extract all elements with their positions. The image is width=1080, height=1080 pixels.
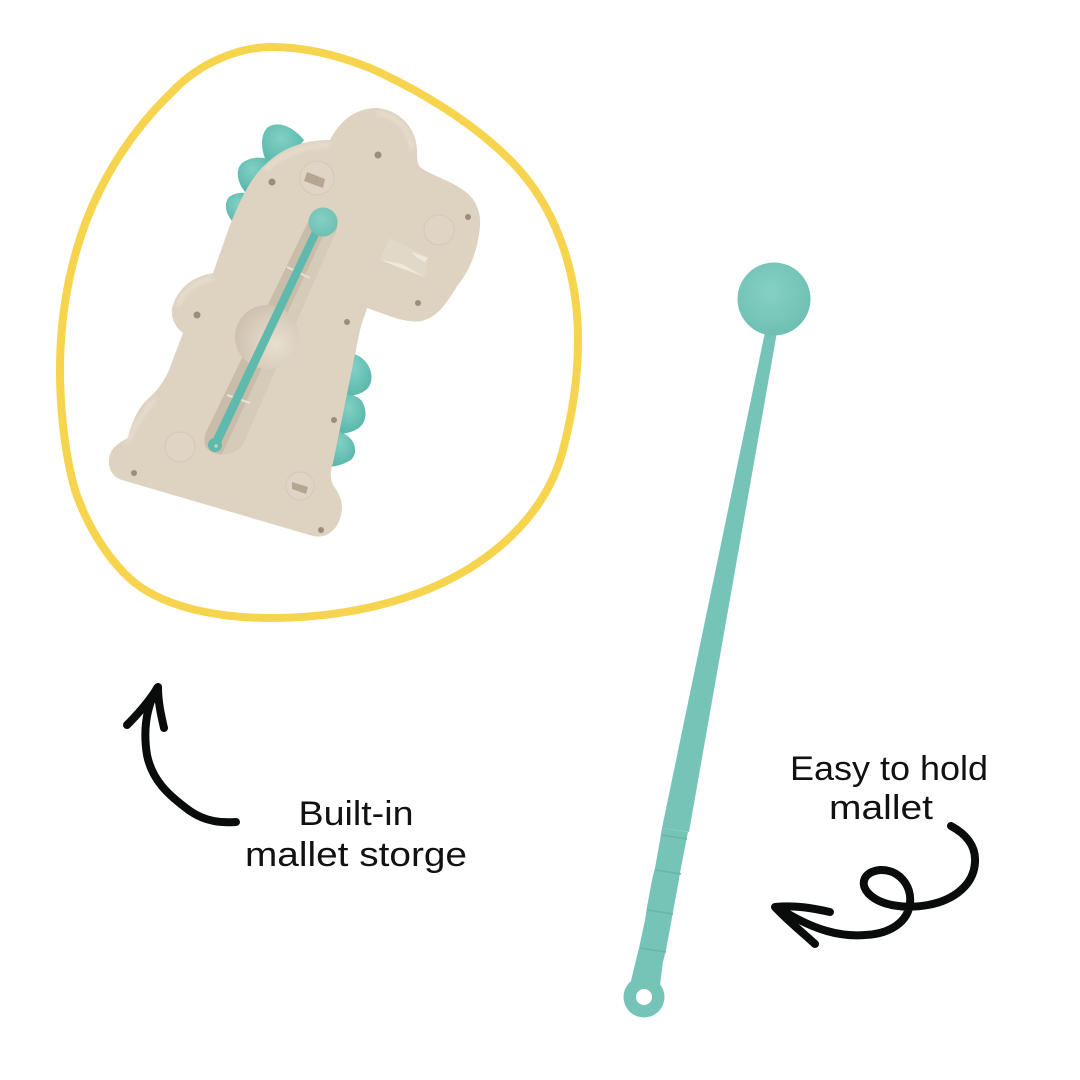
- centre recess: [235, 305, 299, 369]
- mallet in slot: [208, 208, 338, 452]
- lower spikes: [328, 352, 371, 467]
- sticker glints: [381, 252, 428, 276]
- mallet slot: [204, 208, 338, 454]
- screws: [131, 152, 471, 533]
- rectangular clip holes: [292, 172, 325, 494]
- caption: easy to hold mallet: mallet: [829, 789, 934, 827]
- upper spikes: [226, 124, 304, 224]
- body edge highlight: [128, 113, 412, 442]
- caption: built-in mallet storage: mallet storge: [245, 836, 467, 874]
- arrow: to mallet storage: [127, 687, 236, 822]
- caption: built-in mallet storage: [245, 795, 467, 874]
- mallet head: [738, 262, 810, 336]
- caption: built-in mallet storage: Built-in: [298, 795, 414, 833]
- caption: easy to hold mallet: [790, 750, 988, 827]
- mallet grip: [630, 828, 688, 985]
- large teal mallet: [624, 262, 810, 1018]
- mallet loop hole: [636, 989, 652, 1005]
- mallet shaft: [662, 332, 777, 832]
- right side of mallet slot, lighter: [222, 222, 337, 454]
- dinosaur toy, back view: [109, 108, 480, 537]
- raised discs: [165, 161, 454, 500]
- label sticker: [380, 238, 428, 278]
- mallet loop: [624, 976, 664, 1018]
- body: [109, 108, 480, 537]
- mallet grip ridges: [640, 835, 687, 952]
- yellow blob outline: [60, 47, 578, 618]
- caption: easy to hold mallet: Easy to hold: [790, 750, 988, 788]
- arrow: to mallet grip: [775, 826, 975, 944]
- clips across the slot: [227, 267, 310, 403]
